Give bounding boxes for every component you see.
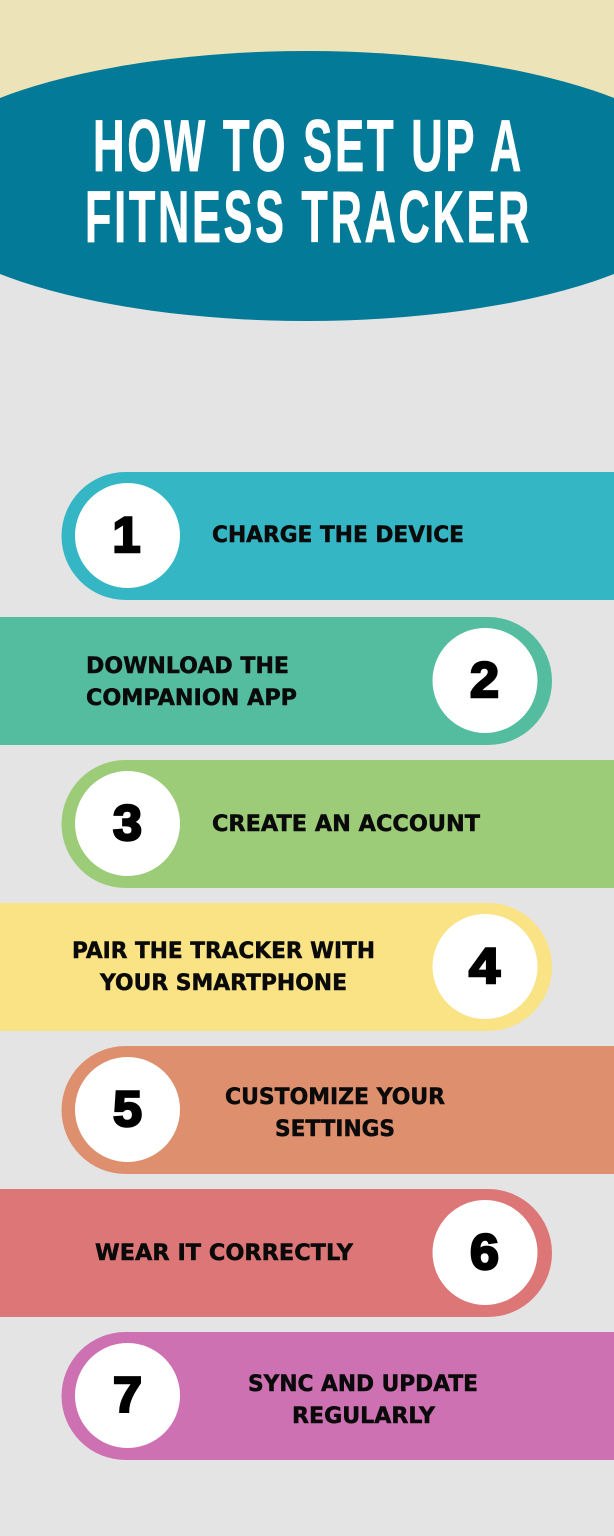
step 6: 6 xyxy=(470,1224,499,1280)
step 4: YOUR SMARTPHONE xyxy=(99,971,347,996)
step 7: 7 xyxy=(113,1367,142,1423)
step 1: CHARGE THE DEVICE xyxy=(212,523,464,548)
step 4: PAIR THE TRACKER WITH xyxy=(72,939,375,964)
step 1 xyxy=(62,472,614,600)
step 2: DOWNLOAD THE xyxy=(86,654,289,679)
step 5: CUSTOMIZE YOUR xyxy=(225,1085,445,1110)
step 6 xyxy=(0,1189,552,1317)
step 4 xyxy=(0,903,552,1031)
step 4: 4 xyxy=(469,938,500,994)
step 7: REGULARLY xyxy=(292,1404,436,1429)
step 2: 2 xyxy=(470,652,499,708)
step 3: CREATE AN ACCOUNT xyxy=(212,812,480,837)
step 6: WEAR IT CORRECTLY xyxy=(95,1241,354,1266)
step 7 xyxy=(62,1332,614,1460)
step 3: 3 xyxy=(113,795,142,851)
step 5 xyxy=(62,1046,614,1174)
step 5: SETTINGS xyxy=(275,1117,395,1142)
title banner xyxy=(0,51,614,321)
step 7: SYNC AND UPDATE xyxy=(248,1372,478,1397)
step 1: 1 xyxy=(112,507,140,563)
step 2: COMPANION APP xyxy=(86,686,297,711)
step 2 xyxy=(0,617,552,745)
step 5: 5 xyxy=(113,1081,142,1137)
title xyxy=(85,106,532,258)
step 3 xyxy=(62,760,614,888)
